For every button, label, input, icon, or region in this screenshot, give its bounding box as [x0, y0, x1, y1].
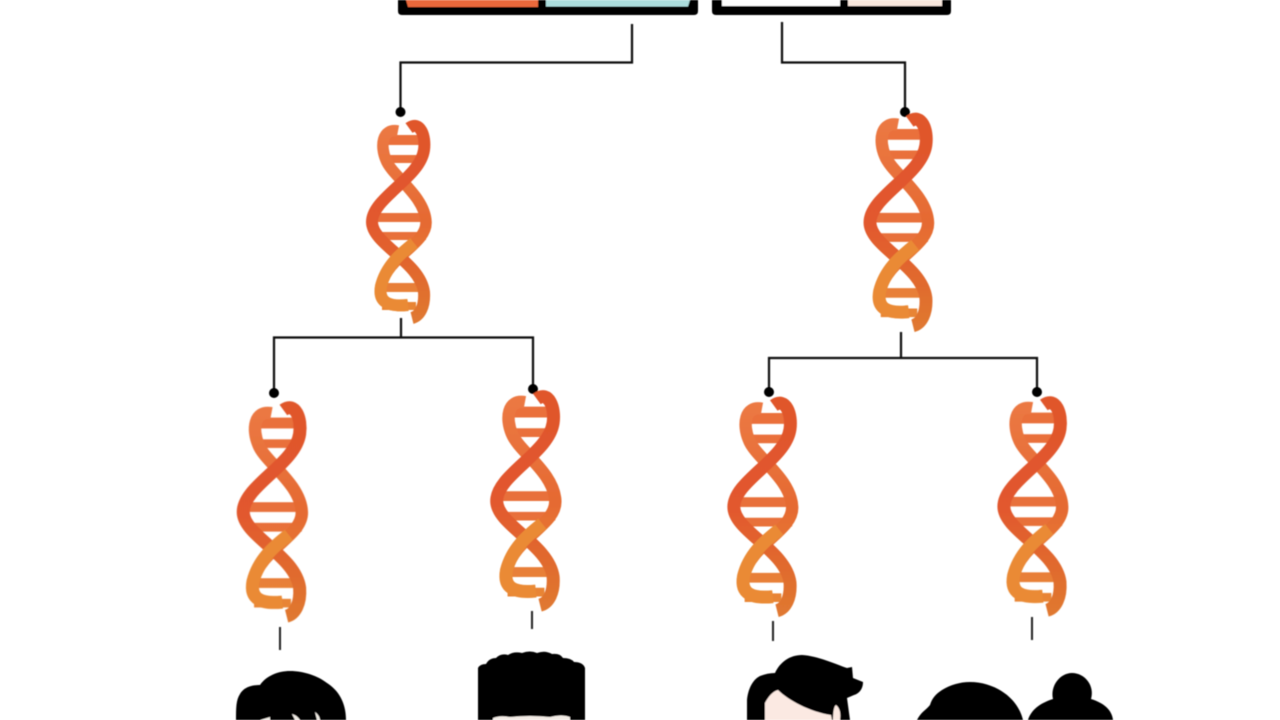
person: child 4b hair with bun — [1028, 673, 1113, 720]
tick: child 4 — [1031, 617, 1033, 640]
tick: child 2 — [531, 611, 533, 629]
tick: child 1 — [279, 627, 281, 650]
icon: DNA helix child 3 — [734, 403, 792, 611]
white swatch — [722, 0, 840, 6]
icon: DNA helix child 1 — [243, 408, 302, 616]
connector: left box to parent DNA — [396, 24, 632, 117]
connector: left branch — [269, 318, 538, 398]
connector: right branch — [764, 332, 1042, 397]
person: child 2 hair — [478, 652, 585, 720]
person: child 3 head — [747, 655, 863, 720]
teal swatch — [546, 0, 690, 6]
panel: right top box — [712, 0, 951, 15]
panel: left top box — [398, 0, 698, 15]
orange swatch — [406, 0, 538, 7]
person: child 1 hair — [236, 671, 346, 720]
icon: DNA helix top right — [870, 119, 928, 326]
icon: DNA helix child 2 — [497, 397, 555, 605]
face gap — [260, 712, 320, 720]
person: child 4a hair — [917, 682, 1023, 720]
face gap — [493, 716, 570, 720]
icon: DNA helix child 4 — [1004, 403, 1062, 610]
tick: child 3 — [772, 621, 774, 641]
face — [765, 690, 832, 720]
icon: DNA helix top left — [372, 126, 426, 318]
hair sliver — [833, 705, 840, 720]
peach swatch — [848, 0, 942, 6]
connector: right box to parent DNA — [782, 22, 910, 117]
